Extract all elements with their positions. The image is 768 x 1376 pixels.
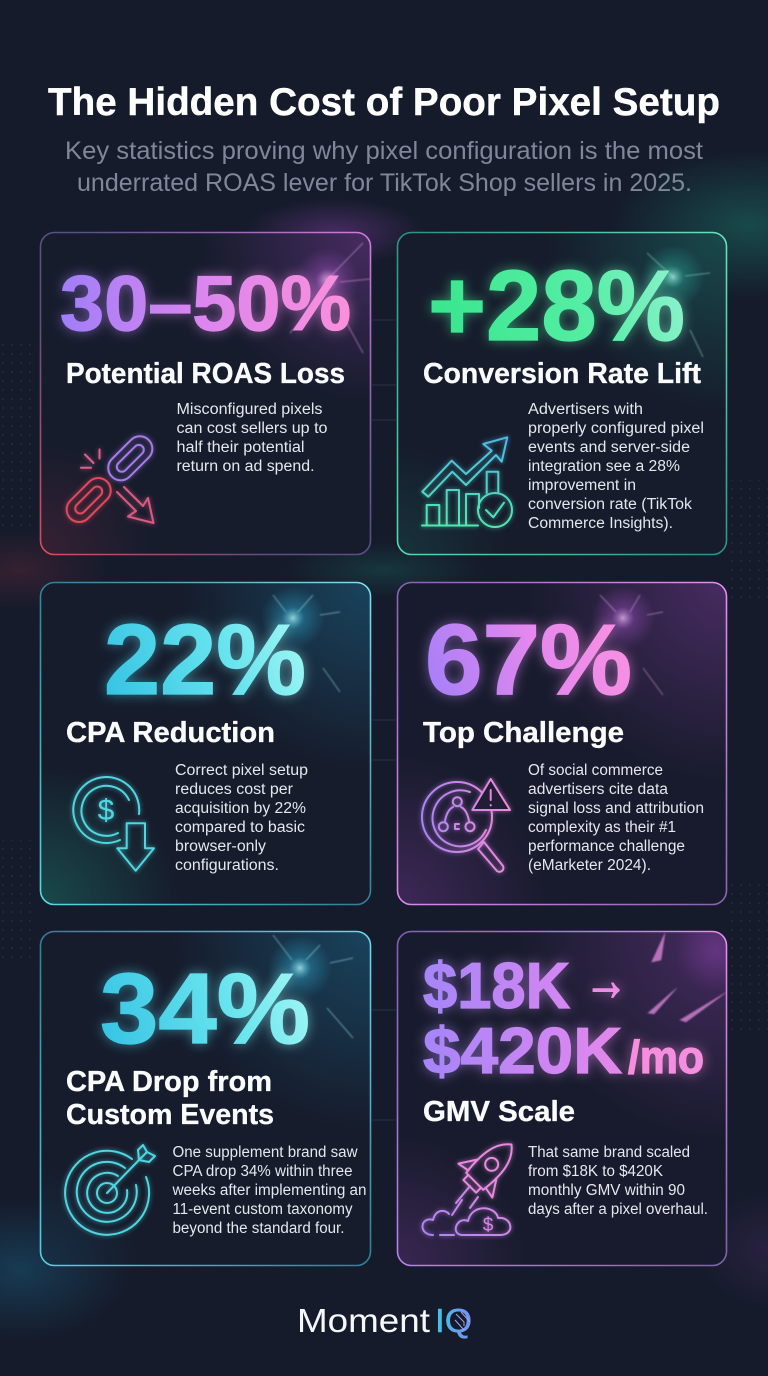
body text: acquisition by 22% — [175, 800, 306, 817]
heading: Conversion Rate Lift — [423, 358, 701, 390]
body text: performance challenge — [528, 838, 685, 855]
icon: broken chain with down arrow — [61, 431, 158, 527]
body text: browser-only — [175, 838, 266, 855]
logo: Moment — [297, 1302, 430, 1339]
body text: from $18K to $420K — [528, 1163, 664, 1180]
body text: Of social commerce — [528, 762, 663, 779]
panel: CPA reduction — [40, 582, 372, 906]
body text: Advertisers with — [528, 401, 643, 418]
body text: return on ad spend. — [176, 458, 314, 475]
subtitle: underrated ROAS lever for TikTok Shop sellers in 2025. — [77, 169, 692, 197]
body text: Misconfigured pixels — [176, 401, 323, 418]
body text: One supplement brand saw — [172, 1144, 358, 1161]
panel: CPA drop from custom events — [40, 930, 372, 1266]
body text: integration see a 28% — [528, 458, 680, 475]
body text — [528, 1144, 708, 1218]
body text — [528, 762, 704, 874]
icon: rocket with money cloud — [422, 1128, 528, 1236]
body text: weeks after implementing an — [172, 1182, 366, 1199]
panel: potential ROAS loss — [40, 232, 372, 556]
body text — [175, 762, 308, 874]
body text: can cost sellers up to — [176, 420, 328, 437]
body text: reduces cost per — [175, 781, 293, 798]
subtitle — [65, 137, 703, 197]
big number: /mo — [628, 1031, 704, 1083]
body text: days after a pixel overhaul. — [528, 1201, 708, 1218]
big number: $18K — [423, 949, 570, 1022]
body text: signal loss and attribution — [528, 800, 704, 817]
big number: $420K — [423, 1014, 622, 1087]
body text: Commerce Insights). — [528, 515, 673, 532]
body text: CPA drop 34% within three — [172, 1163, 352, 1180]
body text: beyond the standard four. — [172, 1220, 344, 1237]
body text: improvement in — [528, 477, 636, 494]
panel: conversion rate lift — [396, 232, 728, 556]
big number: +28% — [428, 250, 685, 362]
big number: 22% — [104, 604, 306, 716]
body text: events and server-side — [528, 439, 690, 456]
panel: GMV scale — [396, 930, 728, 1266]
heading: CPA Reduction — [66, 717, 275, 749]
big number: → — [584, 946, 628, 1013]
panel: top challenge — [396, 582, 728, 906]
body text: properly configured pixel — [528, 420, 704, 437]
big number: 34% — [100, 953, 310, 1065]
icon: growth chart with check — [422, 437, 512, 527]
heading: Top Challenge — [423, 717, 624, 749]
heading: Custom Events — [66, 1099, 274, 1131]
icon: coin with down arrow — [73, 777, 154, 871]
title: The Hidden Cost of Poor Pixel Setup — [48, 81, 720, 124]
heading: GMV Scale — [423, 1096, 575, 1128]
body text — [172, 1144, 366, 1237]
body text: Correct pixel setup — [175, 762, 308, 779]
body text: (eMarketer 2024). — [528, 857, 651, 874]
logo: IQ — [435, 1302, 472, 1339]
body text: That same brand scaled — [528, 1144, 690, 1161]
body text — [528, 401, 704, 532]
body text: advertisers cite data — [528, 781, 668, 798]
big number: 67% — [425, 604, 632, 716]
body text: monthly GMV within 90 — [528, 1182, 685, 1199]
icon: magnifier with warning — [422, 779, 510, 872]
big number: 30–50% — [60, 259, 351, 347]
big number — [423, 946, 704, 1087]
body text: compared to basic — [175, 819, 305, 836]
heading — [66, 1066, 274, 1131]
body text: half their potential — [176, 439, 304, 456]
icon: coin with down arrow: $ — [98, 794, 115, 827]
body text: 11-event custom taxonomy — [172, 1201, 353, 1218]
body text — [176, 401, 328, 475]
subtitle: Key statistics proving why pixel configuration is the most — [65, 137, 703, 165]
body text: conversion rate (TikTok — [528, 496, 692, 513]
logo — [297, 1302, 472, 1339]
heading: CPA Drop from — [66, 1066, 272, 1098]
body text: complexity as their #1 — [528, 819, 676, 836]
heading: Potential ROAS Loss — [66, 358, 345, 390]
body text: configurations. — [175, 857, 279, 874]
icon: target with arrow — [65, 1145, 155, 1235]
icon: rocket with money cloud: $ — [483, 1215, 494, 1236]
